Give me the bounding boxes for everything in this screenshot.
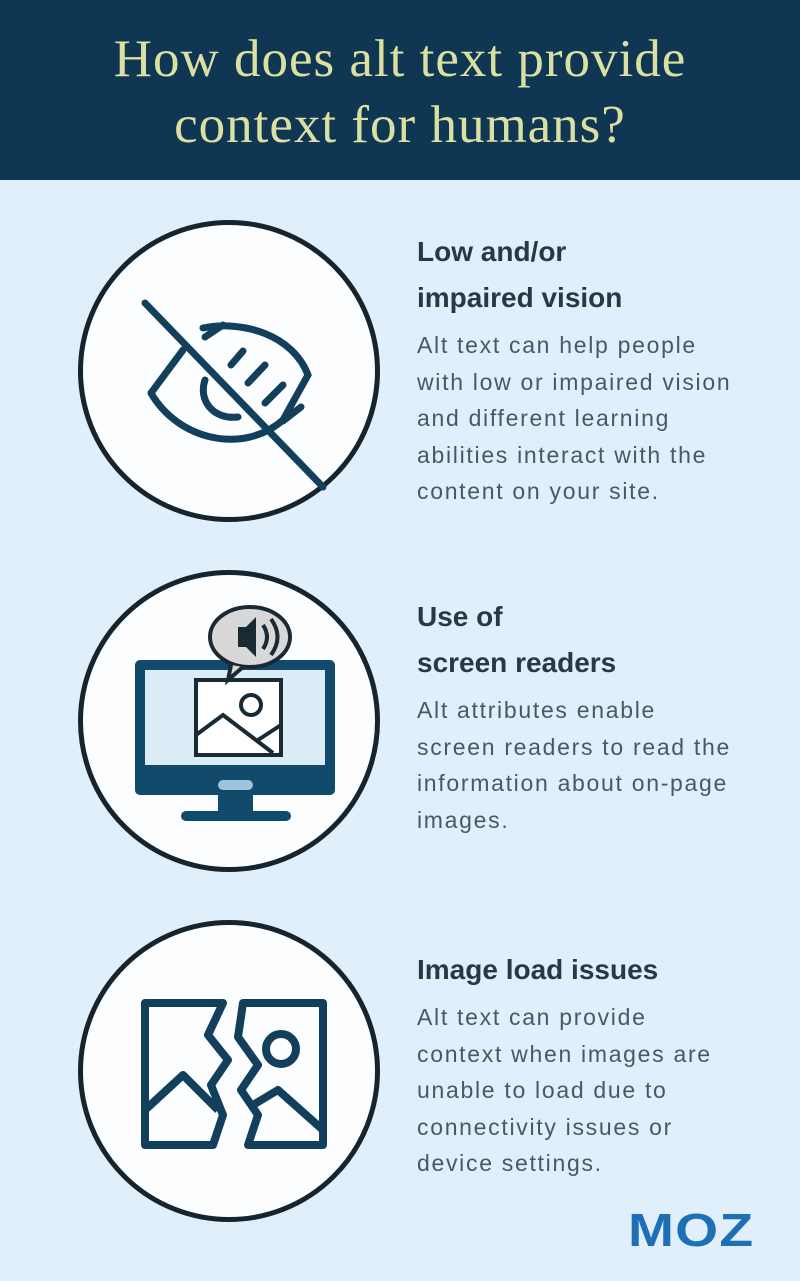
title: How does alt text provide: [114, 30, 686, 88]
text: low vision: [417, 236, 731, 504]
icon: broken image: [78, 920, 380, 1222]
text: low vision: content on your site.: [417, 478, 660, 504]
text: screen readers: screen readers to read the: [417, 734, 731, 760]
text: low vision: with low or impaired vision: [417, 368, 731, 394]
logo: MOZ: MOZ: [628, 1204, 754, 1256]
text: screen readers: [417, 601, 731, 833]
text: screen readers: images.: [417, 806, 509, 832]
text: image load issues: device settings.: [417, 1150, 603, 1176]
title: [114, 30, 686, 154]
icon: crossed eye: [78, 220, 380, 522]
text: low vision: abilities interact with the: [417, 442, 707, 468]
text: low vision: and different learning: [417, 405, 670, 431]
text: image load issues: context when images are: [417, 1040, 712, 1066]
title: context for humans?: [174, 96, 626, 154]
text: low vision: impaired vision: [417, 282, 622, 313]
text: image load issues: connectivity issues or: [417, 1114, 673, 1140]
text: low vision: Low and/or: [417, 236, 566, 267]
text: screen readers: Alt attributes enable: [417, 697, 656, 723]
text: image load issues: Alt text can provide: [417, 1004, 647, 1030]
text: screen readers: screen readers: [417, 647, 616, 678]
icon: monitor with speaker: [78, 570, 380, 872]
text: image load issues: [417, 954, 712, 1176]
text: low vision: Alt text can help people: [417, 332, 697, 358]
text: screen readers: information about on-page: [417, 770, 728, 796]
text: image load issues: Image load issues: [417, 954, 658, 985]
text: image load issues: unable to load due to: [417, 1077, 668, 1103]
header banner: [0, 0, 800, 180]
text: screen readers: Use of: [417, 601, 503, 632]
